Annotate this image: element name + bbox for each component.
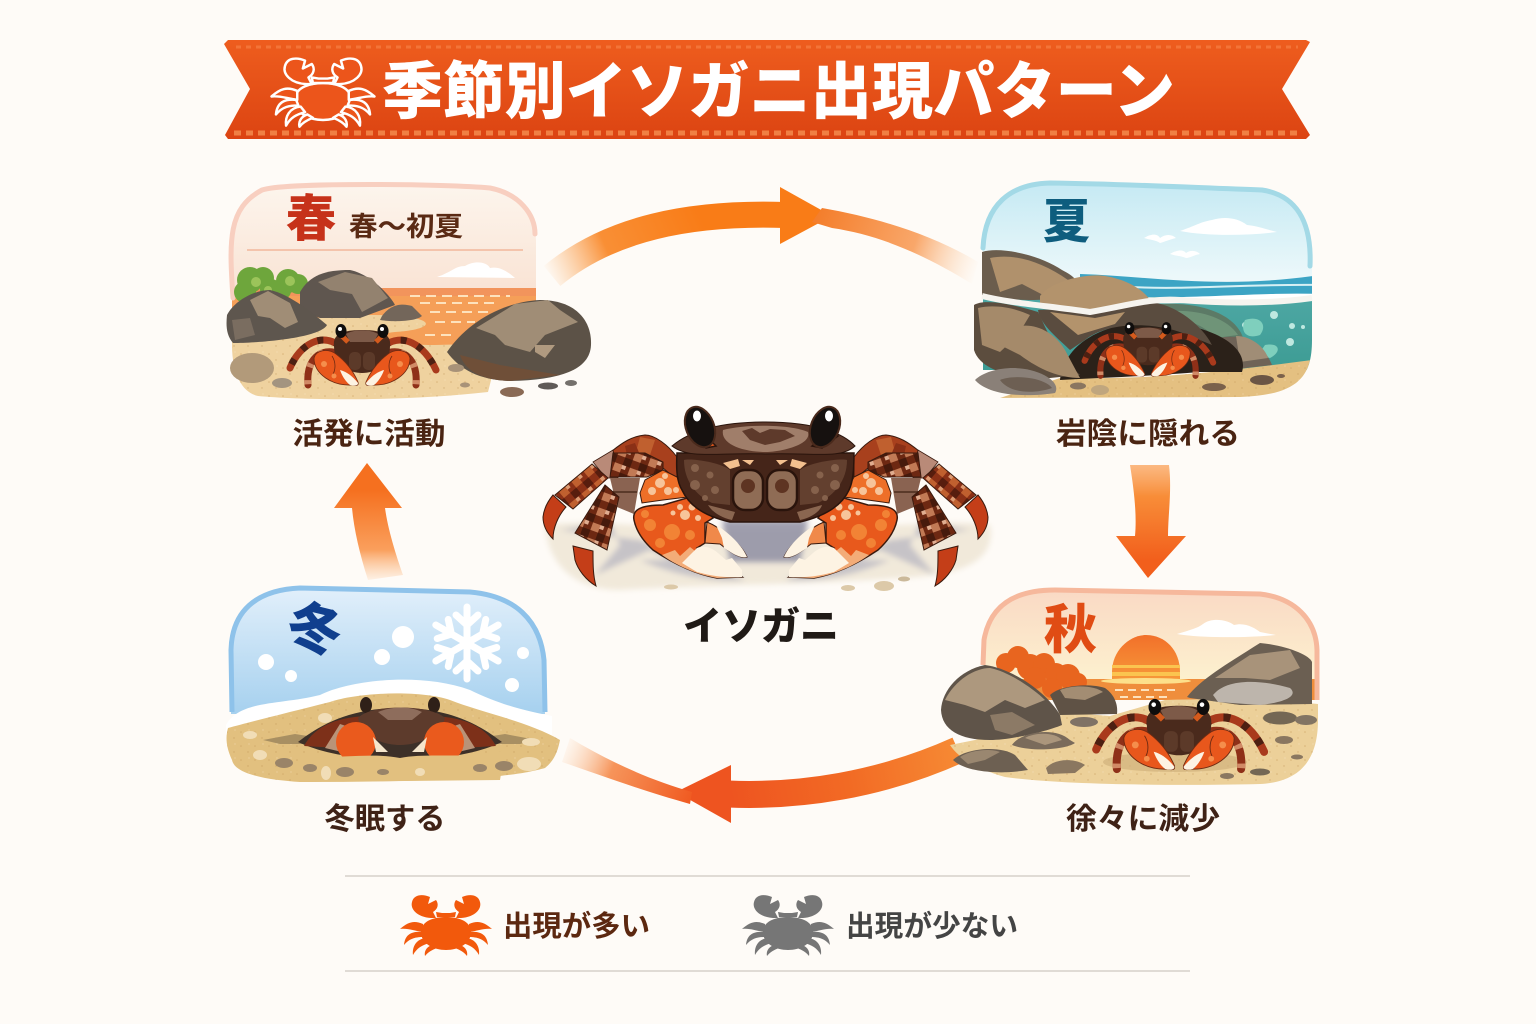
- eyes: [679, 402, 721, 452]
- crab: [1085, 322, 1213, 376]
- central crab illustration: [543, 402, 991, 591]
- arrow: autumn to winter: [562, 738, 958, 823]
- crab: [1096, 699, 1264, 770]
- hibernating crab: [304, 697, 496, 762]
- center label: イソガニ: [683, 606, 839, 649]
- heading: summer kanji: 夏: [1043, 195, 1090, 248]
- rocks: [300, 270, 395, 318]
- clouds and birds: [1180, 218, 1277, 235]
- panel: autumn: [941, 585, 1325, 785]
- cave shadow: [1060, 322, 1243, 380]
- heading: winter kanji: 冬: [281, 594, 348, 666]
- heading: spring kanji: 春: [286, 191, 336, 247]
- wave foam: [982, 296, 1312, 312]
- divider: [247, 249, 523, 251]
- arrow: spring to summer: [552, 187, 978, 284]
- cloud: [437, 262, 515, 278]
- grey rock: [1205, 337, 1272, 372]
- legend label: many: 出現が多い: [503, 909, 650, 943]
- subheading: spring period: 春～初夏: [349, 212, 463, 242]
- panel: winter: [225, 585, 560, 782]
- autumn bushes: [996, 646, 1087, 698]
- caption: spring: 活発に活動: [292, 418, 446, 451]
- sand foreground and pebbles: [300, 750, 505, 782]
- ground shadow: [545, 522, 991, 590]
- heading: autumn kanji: 秋: [1044, 601, 1097, 660]
- panel: spring: [225, 180, 591, 399]
- caption: summer: 岩陰に隠れる: [1056, 418, 1240, 451]
- legend label: few: 出現が少ない: [846, 909, 1018, 943]
- crab shadow: [1103, 752, 1247, 772]
- icon: crab outline: [271, 59, 375, 127]
- arrow: winter to spring: [334, 463, 403, 580]
- rocks: [982, 250, 1079, 300]
- panel: summer: [974, 180, 1320, 400]
- carapace: [677, 453, 854, 522]
- pebbles: [1070, 382, 1086, 390]
- icon: snowflake: [430, 607, 504, 679]
- caption: winter: 冬眠する: [324, 803, 446, 836]
- green submerged rock: [1150, 304, 1245, 350]
- pebbles: [230, 353, 274, 383]
- frame stroke: [983, 590, 1317, 700]
- frame stroke: [231, 588, 545, 712]
- title text: 季節別イソガニ出現パターン: [382, 58, 1175, 127]
- sun: [1112, 635, 1180, 682]
- snow mound: [226, 680, 552, 735]
- frame stroke: [231, 184, 535, 298]
- sand: [232, 315, 500, 399]
- rocks: [1050, 685, 1117, 715]
- sand burrow: [227, 693, 560, 782]
- bushes: [234, 267, 308, 303]
- frame stroke: [983, 183, 1310, 266]
- title banner: [224, 40, 1310, 139]
- sparkling water: [410, 296, 510, 335]
- cloud: [1177, 620, 1276, 637]
- legs and claws: [784, 435, 988, 586]
- arrow: summer to autumn: [1116, 465, 1186, 578]
- snow dots: [258, 626, 529, 692]
- sand: [950, 699, 1318, 785]
- caption: autumn: 徐々に減少: [1066, 803, 1220, 836]
- legend icon: many: [400, 895, 492, 956]
- legend: [345, 876, 1190, 971]
- burrow shadow: [263, 734, 320, 744]
- legend icon: few: [742, 895, 834, 956]
- crab: [290, 324, 436, 386]
- face plates: [733, 470, 763, 510]
